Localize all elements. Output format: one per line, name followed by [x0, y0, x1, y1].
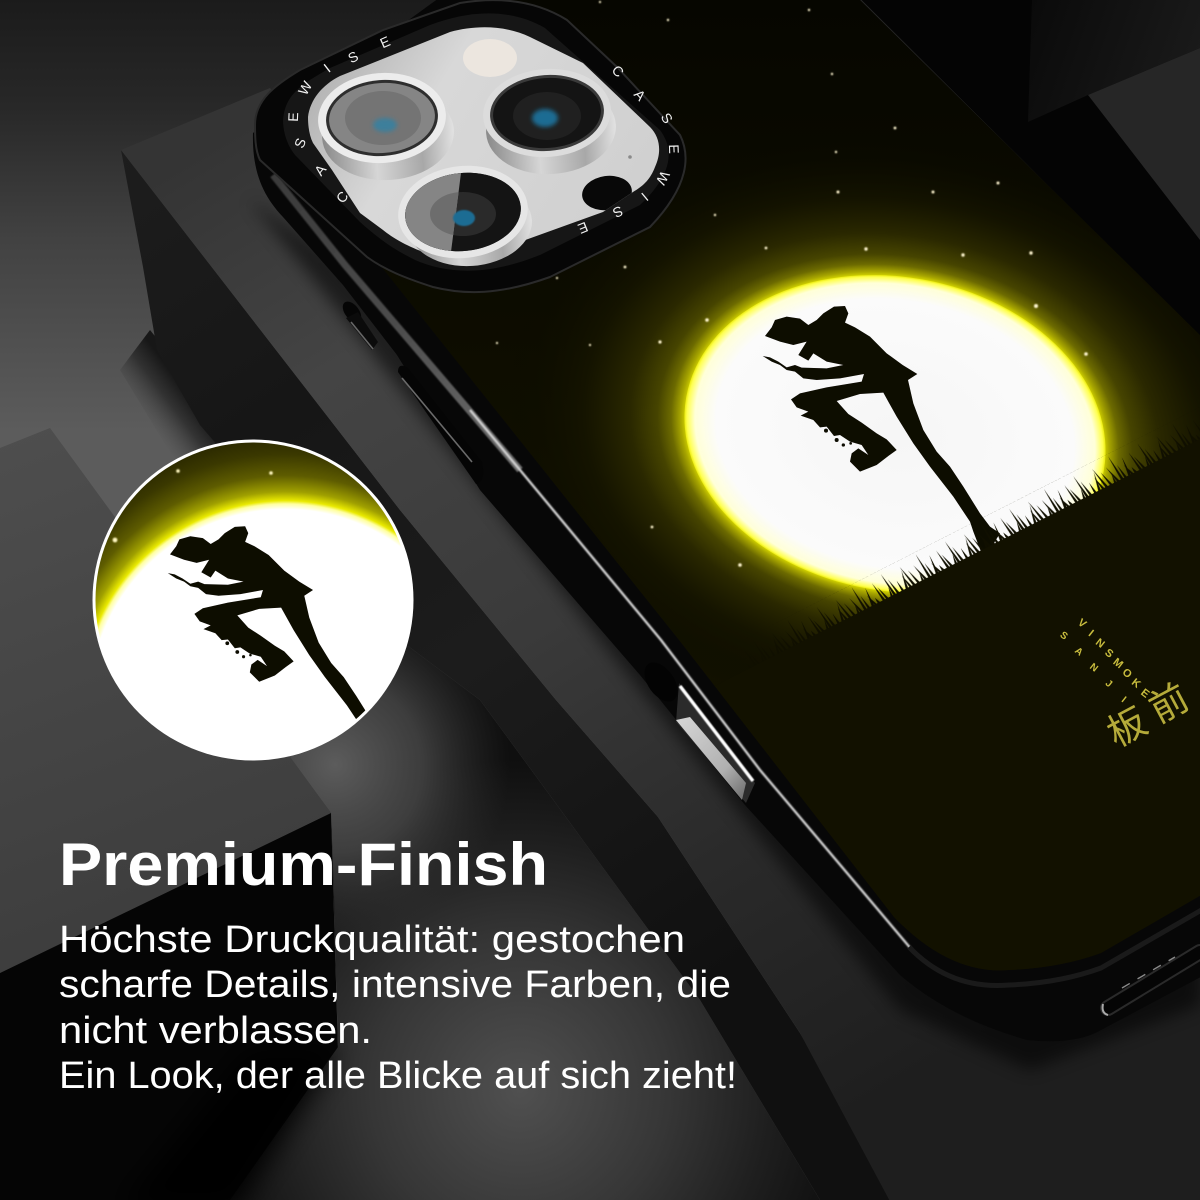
brand text: right side: S — [658, 110, 676, 126]
soft black fade at bottom left — [120, 1050, 338, 1200]
inset artwork — [96, 442, 401, 719]
lens B — [480, 65, 619, 178]
brand text: right side: S — [610, 203, 626, 221]
top right wall — [1028, 0, 1200, 122]
brand text: right side — [576, 62, 682, 237]
signature: SANJI: N — [1087, 661, 1100, 675]
brand text: right side: I — [638, 190, 652, 204]
hill ground — [806, 444, 1193, 660]
phone shadow — [250, 200, 1200, 1070]
case bottom inner lip — [909, 908, 1200, 986]
signature: VINSMOKE: I — [1086, 628, 1096, 639]
inset sky and moon — [96, 442, 401, 638]
camera island — [255, 0, 686, 292]
moon — [684, 275, 1106, 592]
phone case body — [253, 0, 1200, 1041]
case edge gray band — [273, 175, 520, 470]
body copy: Ein Look, der alle Blicke auf sich zieht! — [59, 1055, 737, 1097]
artwork clipped to back panel — [495, 0, 1198, 747]
block soft shadow on floor — [120, 330, 400, 700]
brand text: left side — [285, 33, 393, 206]
brand text: right side: E — [576, 219, 590, 237]
lidar sensor — [582, 176, 632, 210]
body copy: Höchste Druckqualität: gestochen — [59, 919, 685, 961]
character silhouette — [763, 306, 1000, 553]
signature: SANJI: A — [1072, 645, 1085, 659]
camera window — [308, 27, 659, 257]
title: Premium-Finish — [59, 831, 548, 898]
brand text: right side: E — [666, 144, 682, 154]
signature: SANJI — [1060, 632, 1127, 702]
black block face — [0, 813, 430, 1200]
body copy: nicht verblassen. — [59, 1010, 372, 1052]
island frame — [255, 0, 686, 292]
small left block top — [0, 428, 331, 973]
inset stars — [113, 469, 273, 542]
signature: VINSMOKE: E — [1138, 687, 1151, 701]
phone — [250, 0, 1200, 1070]
case right edge strip — [853, 0, 1200, 345]
flash — [463, 39, 517, 77]
signature: SANJI: J — [1103, 678, 1114, 690]
signature: kanji: 板 — [1101, 701, 1154, 756]
back panel — [380, 0, 1200, 970]
signature: SANJI: I — [1119, 695, 1128, 705]
top right block top — [1088, 48, 1200, 240]
signature: kanji — [1106, 682, 1188, 747]
lens A — [315, 69, 457, 184]
brand text: left side: S — [345, 48, 361, 66]
body copy: scharfe Details, intensive Farben, die — [59, 964, 731, 1006]
inset white border — [92, 440, 414, 760]
signature: VINSMOKE: M — [1111, 656, 1125, 671]
moon glow — [589, 193, 1198, 641]
top right dark corner — [700, 0, 1200, 420]
side button: silver — [638, 657, 755, 803]
brand text: left side: E — [285, 112, 301, 122]
stars — [496, 1, 1088, 567]
bottom port — [1103, 952, 1200, 1015]
signature: VINSMOKE: K — [1129, 676, 1143, 691]
lit floor band — [230, 640, 820, 1200]
brand text: left side: I — [321, 60, 333, 76]
signature: VINSMOKE: S — [1102, 647, 1115, 661]
brand text: left side: S — [291, 136, 309, 150]
case edge highlight — [470, 410, 912, 950]
inset detail circle — [90, 438, 416, 764]
lit band upper highlight — [290, 640, 620, 1000]
brand text: left side: A — [311, 161, 330, 179]
signature: VINSMOKE: V — [1075, 617, 1089, 631]
body copy — [59, 919, 737, 1097]
brand text: right side: A — [631, 86, 650, 104]
printed ring band — [283, 13, 669, 271]
brand text: right side: W — [652, 168, 673, 188]
brand text: left side: E — [377, 33, 393, 51]
side button: upper switch — [339, 298, 378, 350]
grass blades — [788, 426, 1196, 642]
lens C — [398, 166, 532, 266]
brand text: right side: C — [609, 62, 627, 80]
inset character silhouette — [168, 526, 366, 719]
signature: SANJI: S — [1058, 630, 1070, 643]
signature: kanji: 前 — [1143, 677, 1196, 732]
signature: VINSMOKE — [1079, 618, 1150, 698]
microphone dot — [628, 155, 632, 159]
brand text: left side: W — [295, 78, 316, 98]
brand text: left side: C — [333, 188, 351, 206]
block dark side face — [121, 150, 900, 1200]
side button: volume — [398, 366, 483, 484]
signature: VINSMOKE: O — [1120, 666, 1134, 681]
signature: VINSMOKE: N — [1093, 636, 1107, 651]
